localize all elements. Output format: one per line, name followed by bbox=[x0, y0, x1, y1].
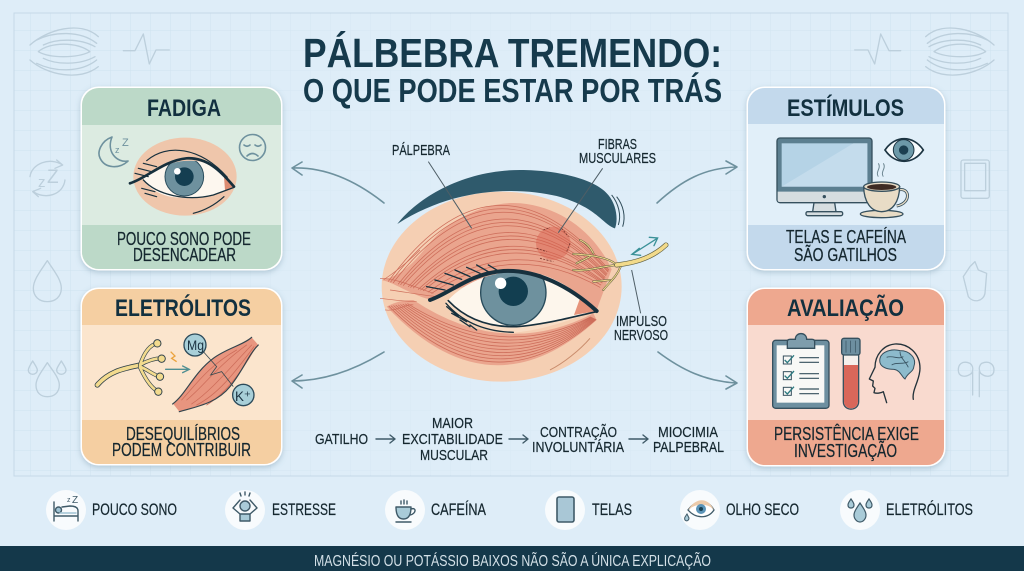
label: pálpebra: PÁLPEBRA bbox=[392, 142, 450, 159]
caption: fadiga bbox=[117, 229, 251, 265]
decorative icon: hand right bbox=[963, 262, 987, 301]
label: K+: K⁺ bbox=[235, 388, 251, 404]
legend: olho seco bbox=[680, 490, 799, 530]
decorative icon: sleep cycle: Z bbox=[47, 167, 59, 188]
flow step: maior excitabilidade muscular: MUSCULAR bbox=[420, 447, 488, 464]
twitching dashes bbox=[537, 228, 570, 262]
lower eyelid muscle bbox=[380, 298, 597, 365]
icon: sad face bbox=[240, 134, 266, 160]
icon: nerve ending bbox=[97, 340, 189, 395]
skin bbox=[382, 192, 622, 382]
icon: clipboard checklist bbox=[773, 334, 829, 408]
lower crease bbox=[550, 338, 590, 370]
legend: cafeína: CAFEÍNA bbox=[431, 500, 486, 519]
title: O QUE PODE ESTAR POR TRÁS bbox=[303, 72, 722, 109]
flow step: miocimia palpebral: PALPEBRAL bbox=[653, 439, 724, 456]
upper eyelid muscle bbox=[380, 203, 612, 310]
lower lid skin band bbox=[445, 301, 597, 333]
nerve bbox=[573, 240, 666, 290]
caption: avaliação bbox=[774, 424, 919, 461]
caption: estímulos bbox=[786, 227, 906, 265]
central eye illustration bbox=[380, 162, 666, 382]
decorative icon: tablet right bbox=[961, 160, 989, 198]
icon: blood tube bbox=[842, 338, 860, 409]
flow step: maior excitabilidade muscular bbox=[402, 415, 503, 464]
icon: moon and zzz: z bbox=[115, 145, 120, 155]
flow arrow 1 bbox=[376, 435, 395, 443]
legend: telas bbox=[545, 490, 632, 530]
flow step: miocimia palpebral bbox=[653, 424, 724, 456]
decorative icon: pulse top left bbox=[123, 34, 169, 64]
leader lines bbox=[428, 162, 641, 313]
flow step: miocimia palpebral: MIOCIMIA bbox=[658, 424, 718, 441]
nerve impulse arrow bbox=[632, 237, 658, 255]
title: PÁLBEBRA TREMENDO: bbox=[303, 30, 722, 76]
legend: cafeína bbox=[385, 490, 486, 530]
flow chain bbox=[315, 415, 724, 464]
label: impulso nervoso: NERVOSO bbox=[614, 327, 668, 344]
icon: muscle with ions bbox=[173, 334, 258, 412]
eyelid outlines and lashes bbox=[427, 265, 597, 332]
decorative icon: muscle top left bbox=[30, 28, 98, 75]
arrow: to avaliação bbox=[658, 352, 737, 389]
legend: pouco sono: Z bbox=[72, 495, 78, 506]
icon: monitor bbox=[777, 138, 872, 216]
label: impulso nervoso bbox=[614, 313, 668, 344]
icon: coffee cup bbox=[860, 163, 907, 218]
caption: estímulos: SÃO GATILHOS bbox=[794, 244, 897, 265]
motion marks bbox=[612, 195, 624, 227]
decorative icon: drop left bbox=[33, 261, 61, 302]
label: impulso nervoso: IMPULSO bbox=[616, 313, 667, 330]
eyeball bbox=[448, 271, 597, 327]
decorative icon: sleep cycle: z bbox=[38, 174, 46, 191]
flow step: contração involuntária: INVOLUNTÁRIA bbox=[532, 439, 624, 456]
flow step: maior excitabilidade muscular: MAIOR bbox=[432, 415, 473, 432]
iris bbox=[480, 272, 547, 326]
decorative icon: sleep cycle bbox=[30, 160, 65, 197]
panel: estímulos bbox=[746, 86, 946, 270]
footer banner: MAGNÉSIO OU POTÁSSIO BAIXOS NÃO SÃO A ÚNICA EXPLICAÇÃO bbox=[314, 553, 711, 570]
label: fibras musculares bbox=[579, 136, 656, 167]
icon: tired eye bbox=[130, 138, 237, 216]
arrow: to estímulos bbox=[657, 161, 737, 203]
title bbox=[303, 30, 722, 109]
twitch highlight bbox=[536, 227, 571, 260]
caption: avaliação: PERSISTÊNCIA EXIGE bbox=[774, 424, 919, 444]
panel: fadiga bbox=[80, 86, 282, 270]
heading: fadiga: FADIGA bbox=[147, 95, 221, 122]
caption: fadiga: DESENCADEAR bbox=[133, 245, 236, 265]
panel: eletrólitos bbox=[80, 288, 282, 466]
legend: telas: TELAS bbox=[592, 501, 632, 519]
icon: moon and zzz bbox=[99, 137, 129, 167]
caption: eletrólitos: PODEM CONTRIBUIR bbox=[112, 440, 251, 460]
flow step: contração involuntária: CONTRAÇÃO bbox=[540, 424, 617, 441]
legend: pouco sono bbox=[46, 490, 177, 530]
legend: estresse bbox=[225, 490, 336, 530]
caption: eletrólitos bbox=[112, 424, 251, 460]
footer banner bbox=[0, 546, 1024, 571]
label: fibras musculares: FIBRAS bbox=[598, 136, 637, 153]
caption: estímulos: TELAS E CAFEÍNA bbox=[786, 227, 906, 247]
decorative icon: pulse top right bbox=[855, 34, 901, 64]
caption: avaliação: INVESTIGAÇÃO bbox=[794, 440, 897, 461]
heading: eletrólitos: ELETRÓLITOS bbox=[115, 294, 251, 322]
eyebrow bbox=[397, 170, 617, 228]
label: Mg: Mg bbox=[187, 337, 204, 353]
flow arrow 2 bbox=[509, 435, 528, 443]
legend: estresse: ESTRESSE bbox=[272, 501, 336, 519]
decorative icon: drops left bbox=[28, 361, 66, 397]
icon: head with brain bbox=[869, 344, 920, 403]
legend: eletrólitos: ELETRÓLITOS bbox=[886, 500, 973, 519]
icon: eye bbox=[885, 139, 923, 161]
flow step: maior excitabilidade muscular: EXCITABILIDADE bbox=[402, 431, 503, 448]
arrow: to eletrólitos bbox=[292, 352, 384, 388]
legend: pouco sono: z bbox=[67, 497, 71, 504]
flow step: contração involuntária bbox=[532, 424, 624, 456]
icon: moon and zzz: Z bbox=[122, 137, 129, 149]
legend: pouco sono: POUCO SONO bbox=[92, 501, 177, 519]
decorative icon: kidneys right bbox=[958, 362, 994, 397]
legend: eletrólitos bbox=[840, 490, 973, 530]
decorative icon: muscle top right bbox=[926, 28, 994, 75]
caption: eletrólitos: DESEQUILÍBRIOS bbox=[126, 424, 240, 444]
panel: avaliação bbox=[746, 288, 946, 466]
legend: olho seco: OLHO SECO bbox=[726, 501, 799, 519]
heading: avaliação: AVALIAÇÃO bbox=[787, 294, 904, 322]
arrow: to fadiga bbox=[292, 162, 384, 203]
flow arrow 3 bbox=[629, 435, 648, 443]
flow step: gatilho: GATILHO bbox=[315, 431, 368, 448]
caption: fadiga: POUCO SONO PODE bbox=[117, 229, 251, 249]
label: fibras musculares: MUSCULARES bbox=[579, 150, 656, 167]
caruncle bbox=[574, 298, 597, 315]
heading: estímulos: ESTÍMULOS bbox=[787, 94, 904, 122]
